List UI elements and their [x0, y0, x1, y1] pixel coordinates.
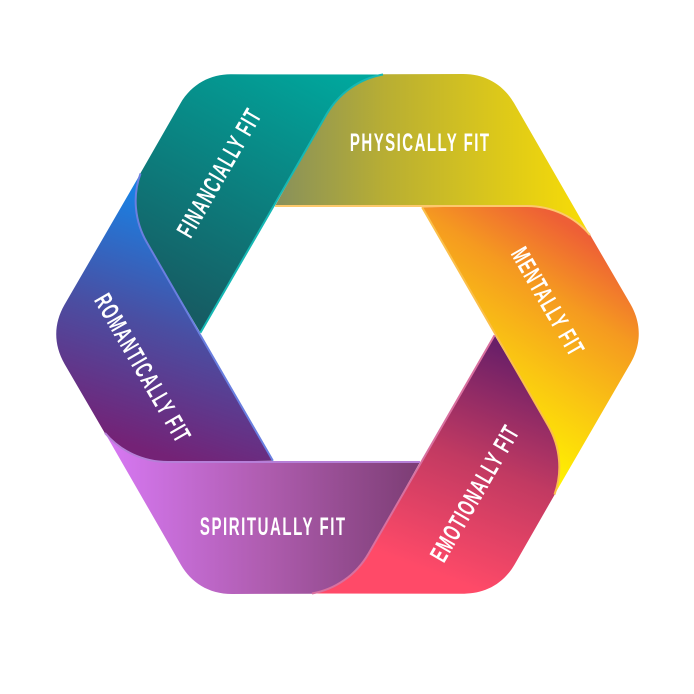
band: romantically fit [1, 173, 298, 527]
label: romantically fit: ROMANTICALLY FIT [88, 289, 196, 447]
label: mentally fit: MENTALLY FIT [505, 243, 589, 361]
band: financially fit [86, 0, 383, 347]
band: spiritually fit [105, 433, 420, 594]
label: financially fit: FINANCIALLY FIT [172, 104, 267, 242]
label: physically fit: PHYSICALLY FIT [350, 129, 489, 157]
band: mentally fit [397, 141, 694, 495]
band: physically fit [275, 74, 590, 235]
label: emotionally fit: EMOTIONALLY FIT [425, 421, 525, 567]
band: emotionally fit [312, 321, 609, 674]
label: spiritually fit: SPIRITUALLY FIT [200, 513, 345, 541]
